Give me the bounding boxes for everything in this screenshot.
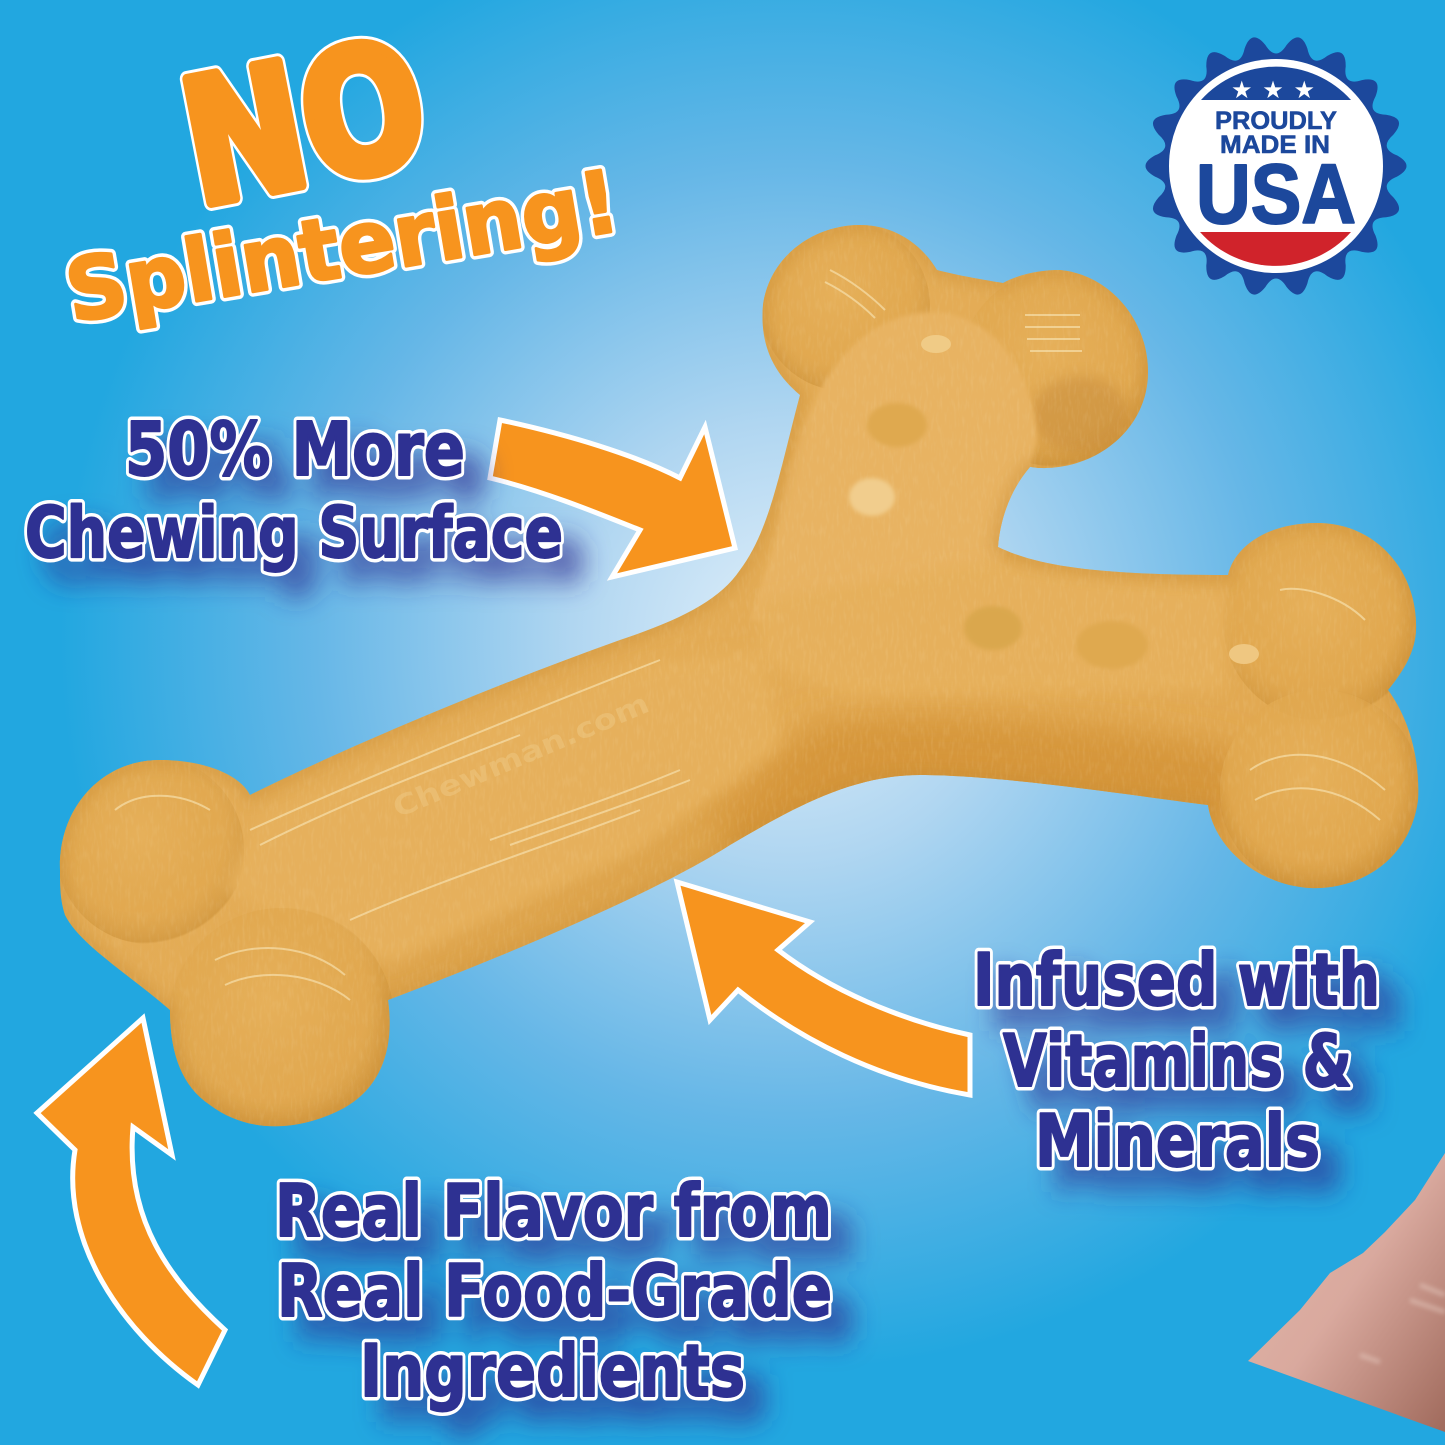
callout: Infused with Vitamins and Minerals: Vitamins & [1003, 1019, 1352, 1103]
arrow: to vitamins [677, 882, 970, 1095]
callout: Real Flavor from Real Food-Grade Ingredients [275, 1169, 852, 1435]
callout: Real Flavor from Real Food-Grade Ingredients: Real Food-Grade [277, 1249, 832, 1333]
product: chew bone [50, 220, 1425, 1140]
callout: Real Flavor from Real Food-Grade Ingredients: Ingredients [360, 1329, 745, 1413]
callout: 50% More Chewing Surface: 50% More [125, 407, 465, 493]
lower shade of right arm [710, 716, 1240, 860]
callout: Infused with Vitamins and Minerals: Vitamins & [1003, 1019, 1352, 1103]
callout: Real Flavor from Real Food-Grade Ingredients: Ingredients [360, 1329, 745, 1413]
heading: NO Splintering: Splintering! [59, 152, 626, 343]
callout: Real Flavor from Real Food-Grade Ingredients: Real Flavor from [275, 1169, 832, 1253]
callout: Real Flavor from Real Food-Grade Ingredients: Real Flavor from [275, 1169, 832, 1253]
photo: hand corner [1248, 1153, 1445, 1432]
rim shading [60, 225, 1418, 1126]
callout: 50% More Chewing Surface: 50% More [125, 407, 465, 493]
left shaft lower shade [386, 852, 686, 983]
callout: 50% More Chewing Surface: Chewing Surface [25, 492, 563, 574]
heading: NO Splintering: NO [167, 2, 441, 245]
callout: 50% More Chewing Surface: 50% More [145, 429, 485, 515]
callout: Real Flavor from Real Food-Grade Ingredients: Real Flavor from [295, 1191, 852, 1275]
callout: Infused with Vitamins and Minerals: Minerals [1035, 1099, 1320, 1183]
surface ridges [115, 270, 1385, 1000]
neck arch [750, 312, 1037, 640]
arrow: to flavor knob [37, 1018, 225, 1385]
callout: Infused with Vitamins and Minerals: Minerals [1055, 1121, 1340, 1205]
raised bumps [921, 335, 951, 353]
heading: NO Splintering [59, 2, 626, 343]
rear knob edge shading [68, 794, 244, 943]
shaft light area [225, 650, 780, 965]
arrow: to chewing surface [490, 420, 735, 577]
rear knob fills [60, 760, 170, 866]
callout: 50% More Chewing Surface [25, 407, 583, 596]
callout: Real Flavor from Real Food-Grade Ingredients: Ingredients [380, 1351, 765, 1435]
badge: Proudly Made in USA: MADE IN [1220, 131, 1330, 159]
front knobs [170, 908, 344, 1066]
badge: Proudly Made in USA: PROUDLY [1215, 107, 1337, 135]
callout: Real Flavor from Real Food-Grade Ingredients: Real Food-Grade [277, 1249, 832, 1333]
front knob edge shading [178, 948, 392, 1126]
callout: Infused with Vitamins and Minerals [973, 938, 1400, 1205]
grain texture [50, 220, 1425, 1140]
badge: Proudly Made in USA: ★★★ [1231, 76, 1315, 104]
callout: Infused with Vitamins and Minerals: Minerals [1035, 1099, 1320, 1183]
callout: Real Flavor from Real Food-Grade Ingredients: Real Food-Grade [297, 1271, 852, 1355]
embossed brand text: Chewman.com [388, 687, 654, 824]
shaded underside of top right knob [1032, 377, 1128, 453]
heading: NO Splintering: NO [167, 2, 441, 245]
badge: Proudly Made in USA: USA [1196, 147, 1356, 241]
heading: NO Splintering: Splintering! [59, 152, 626, 343]
right arm light area [760, 560, 1225, 695]
badge: Proudly Made in USA [1146, 37, 1406, 295]
callout: 50% More Chewing Surface: Chewing Surface [45, 514, 583, 596]
callout: 50% More Chewing Surface: Chewing Surface [25, 492, 563, 574]
